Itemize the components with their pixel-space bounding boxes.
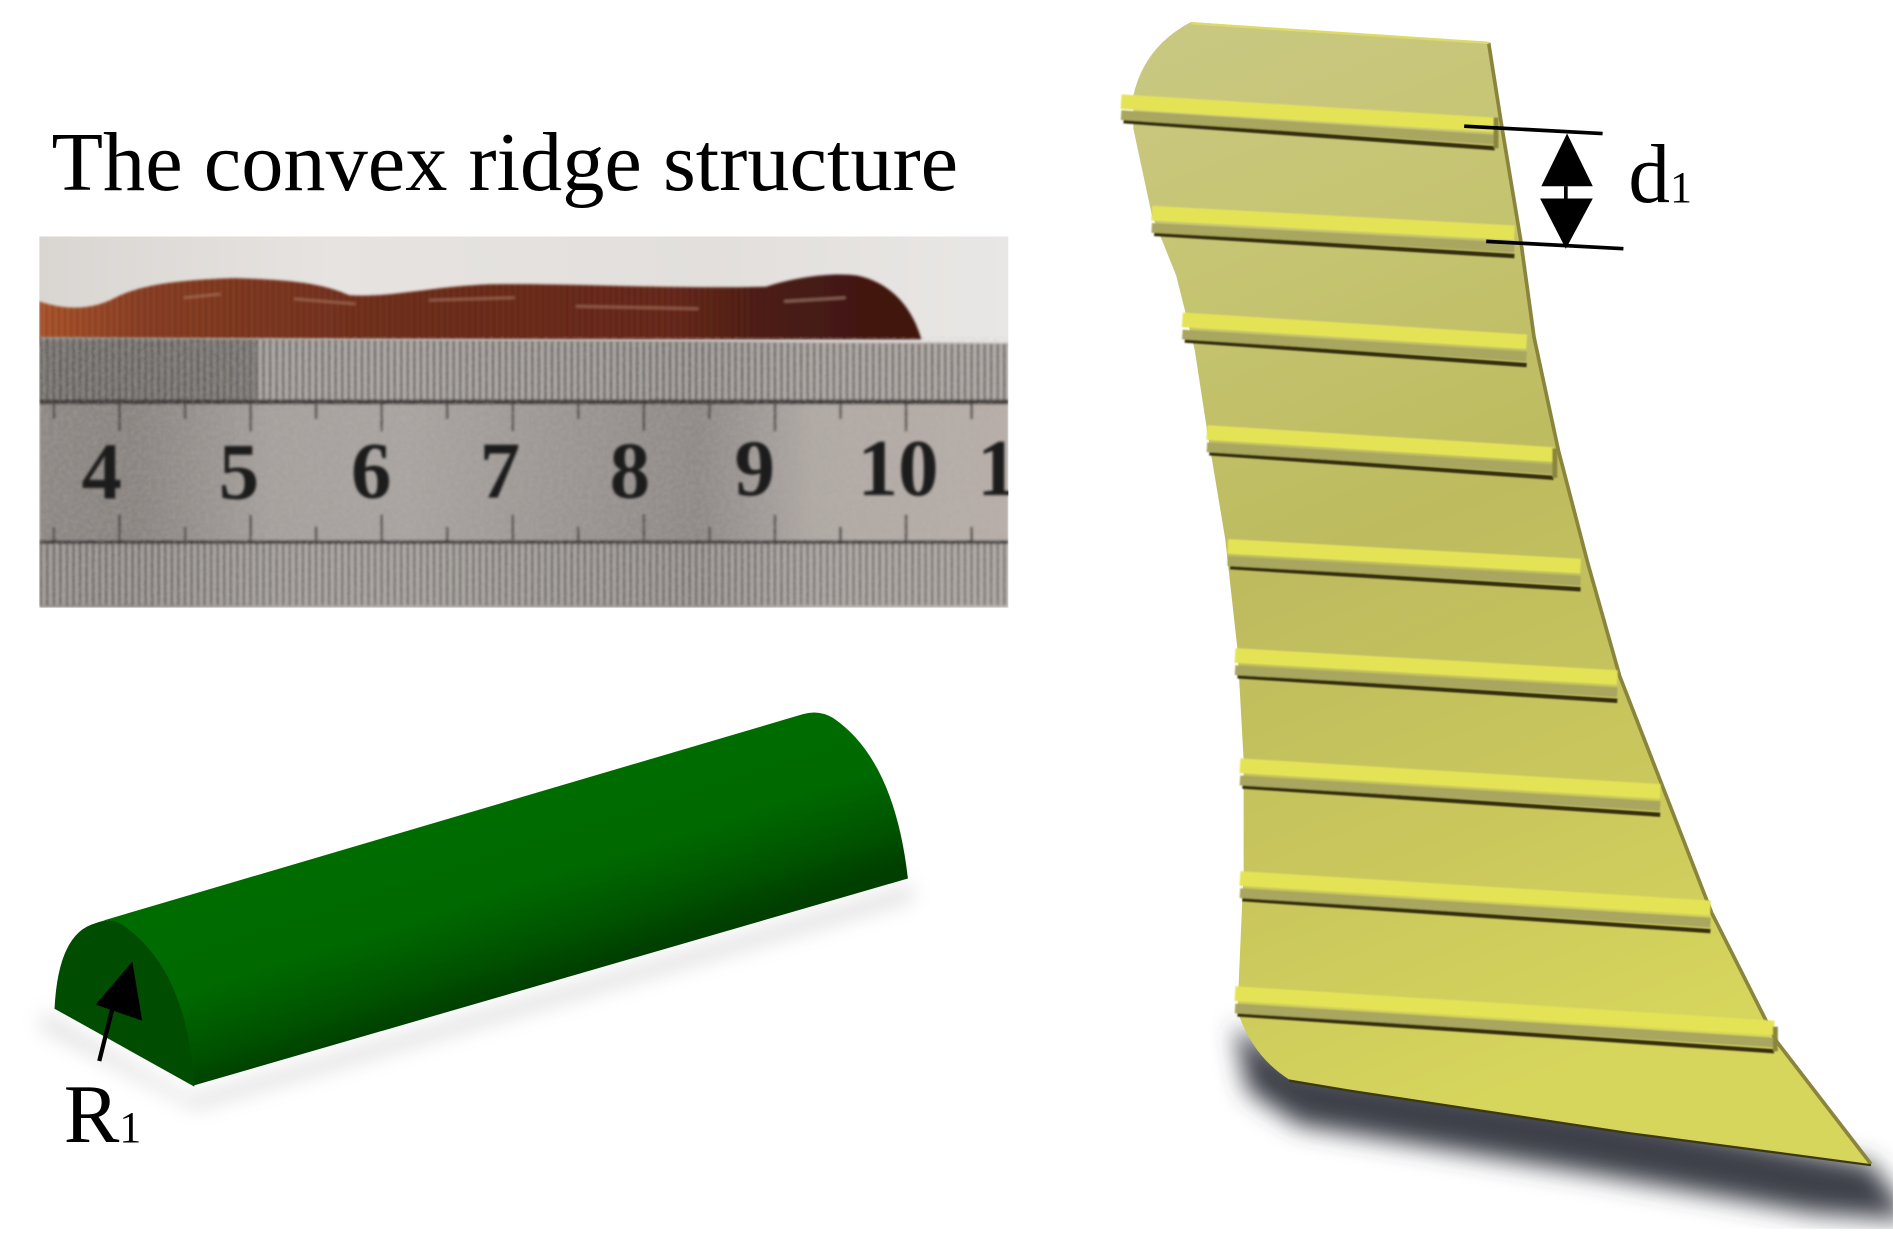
blade dark trailing edge <box>1489 43 1871 1164</box>
ridge 8 <box>1240 878 1710 931</box>
ridge soft shadow <box>42 885 913 1109</box>
upper fine scale <box>39 338 1008 402</box>
blade top highlight <box>1191 23 1489 43</box>
ridge front face <box>55 921 194 1086</box>
blade lower dark edge <box>1289 1081 1871 1165</box>
ruler numerals: 10 <box>858 424 939 513</box>
earthworm <box>39 274 921 339</box>
ridge 4 <box>1207 432 1555 478</box>
panel: green convex ridge model <box>42 713 913 1161</box>
ridge 7 <box>1240 766 1660 815</box>
arrow: R1 pointer <box>96 962 142 1061</box>
ridge 5 <box>1228 546 1581 589</box>
ruler numerals: 5 <box>219 428 259 517</box>
centimetre ticks upper <box>39 404 1008 431</box>
dimension marker: d1 spacing <box>1464 126 1623 249</box>
title: The convex ridge structure <box>51 117 958 209</box>
ridge 9 <box>1235 994 1775 1051</box>
centimetre ticks lower <box>39 515 1008 542</box>
ruler numerals: 4 <box>82 428 122 517</box>
ruler numerals: 1 <box>977 424 1018 513</box>
blade surface <box>1133 22 1871 1164</box>
ridge 2 <box>1152 213 1514 256</box>
ruler numerals: 7 <box>480 426 520 515</box>
label d1: d1 <box>1628 129 1692 221</box>
ruler numerals <box>80 440 1008 502</box>
panel: blade with convex ridges <box>1121 22 1893 1220</box>
blade ground shadow <box>1235 1027 1893 1220</box>
ridge 6 <box>1235 655 1617 701</box>
ruler numerals: 8 <box>610 426 650 515</box>
ruler numerals: 9 <box>735 424 775 513</box>
ruler numerals: 6 <box>351 426 391 515</box>
ridge body <box>101 713 908 1086</box>
ridge 1 <box>1121 102 1496 148</box>
ridge 3 <box>1182 320 1527 365</box>
label R1: R1 <box>64 1069 141 1161</box>
photo background paper <box>39 236 1008 347</box>
steel ruler <box>39 337 1008 608</box>
lower fine scale <box>39 544 1008 605</box>
panel: earthworm photo on steel ruler <box>39 236 1018 608</box>
